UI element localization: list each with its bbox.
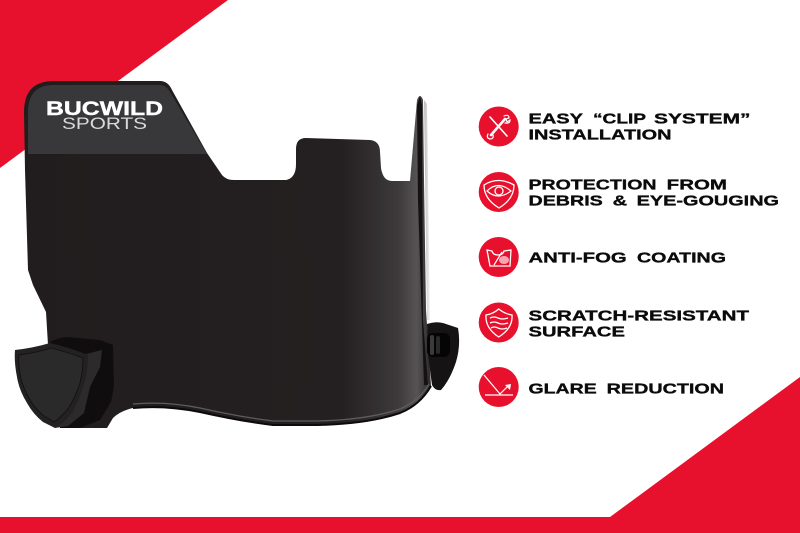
visor lower lip — [133, 386, 431, 425]
text: PROTECTION — [528, 176, 656, 194]
text: INSTALLATION — [528, 127, 672, 144]
red corner bottom-right — [610, 377, 800, 517]
red corner top-left — [0, 0, 228, 168]
text: DEBRIS — [528, 192, 603, 210]
text: SYSTEM” — [654, 110, 750, 128]
red bottom strip — [0, 517, 800, 533]
text: EYE-GOUGING — [637, 192, 779, 210]
visor product — [15, 81, 459, 428]
text: EASY — [528, 110, 583, 128]
logo — [46, 99, 163, 133]
visor bottom rim — [133, 384, 429, 421]
text: SCRATCH-RESISTANT — [528, 308, 749, 325]
icon: fogged visor — [479, 237, 519, 277]
right clip — [427, 322, 459, 390]
left clip — [15, 337, 114, 428]
text: ANTI-FOG — [528, 249, 627, 266]
text: FROM — [667, 176, 727, 194]
clip side — [55, 350, 102, 428]
icon: wrench and screwdriver — [479, 106, 519, 146]
feature: scratch-resistant — [479, 302, 749, 342]
text — [528, 380, 724, 397]
visor body — [24, 81, 431, 428]
text: “CLIP — [593, 110, 646, 128]
text — [528, 308, 749, 341]
feature: glare reduction — [479, 367, 724, 407]
shield outer — [15, 343, 88, 428]
text: & — [613, 192, 627, 210]
shield inner — [19, 348, 83, 422]
right edge glass highlight — [424, 100, 430, 320]
feature: clip system — [479, 106, 750, 146]
logo wordmark: BUCWILD — [46, 99, 163, 120]
icon: wave shield — [479, 302, 519, 342]
text — [528, 110, 750, 144]
text: SURFACE — [528, 324, 625, 341]
logo sub-wordmark: SPORTS — [62, 114, 147, 133]
icon: eye shield — [479, 172, 519, 212]
clip back shadow — [50, 337, 114, 428]
text: REDUCTION — [607, 380, 724, 397]
feature: anti-fog — [479, 237, 726, 277]
icon: reflected ray — [479, 367, 519, 407]
text — [528, 176, 779, 210]
text: GLARE — [528, 380, 597, 397]
feature: protection — [479, 172, 779, 212]
visor right dark rim — [417, 96, 428, 385]
grey logo band — [28, 85, 207, 154]
clip ribs — [427, 333, 450, 357]
text: COATING — [637, 249, 726, 266]
clip body — [427, 322, 459, 390]
text — [528, 249, 726, 266]
